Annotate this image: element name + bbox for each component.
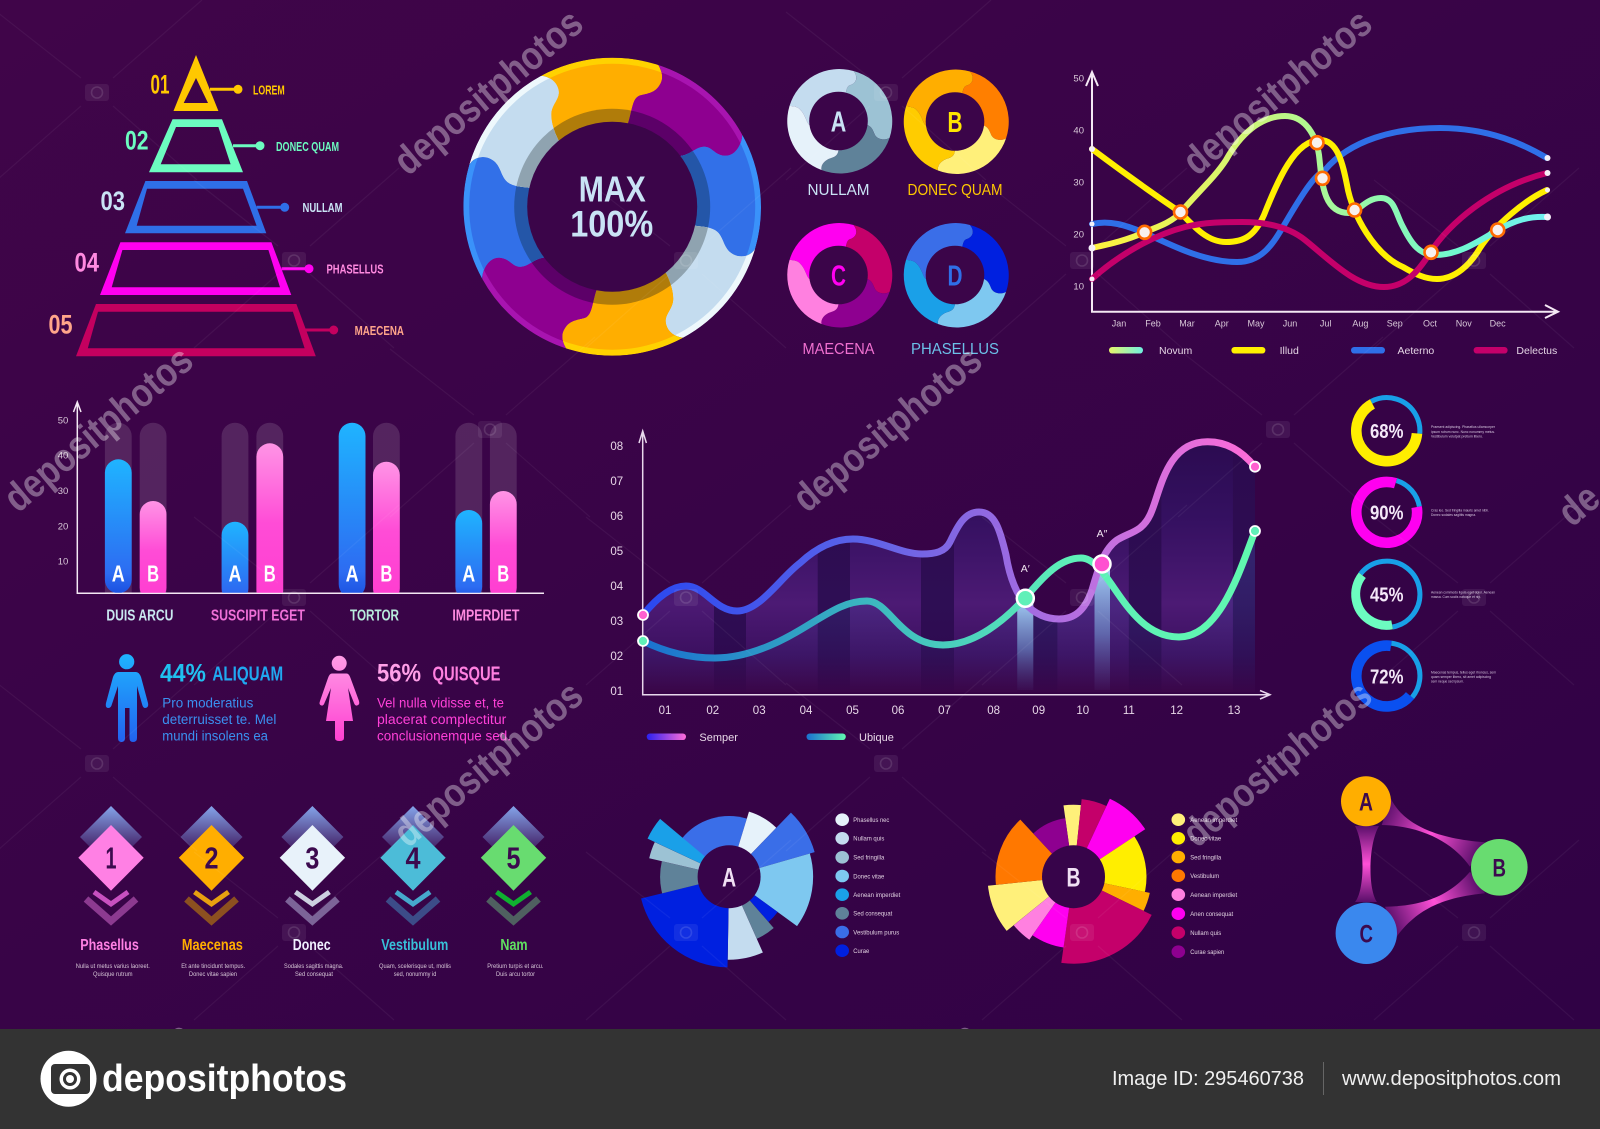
x axis labels: Sep (1387, 318, 1403, 328)
donut A: NULLAM (808, 182, 870, 199)
y labels: 10 (58, 556, 68, 568)
diamond 5 text: Duis arcu tortor (496, 972, 535, 978)
y labels (610, 441, 624, 698)
56% heading: 56% (377, 660, 421, 688)
legend: polar A: Vestibulum purus (853, 929, 900, 936)
panel: pyramid (48, 55, 404, 356)
ring 45% caption (1431, 589, 1495, 599)
bar letters (112, 561, 509, 587)
legend: polar B: Nullam quis (1190, 930, 1222, 937)
x axis labels: Dec (1490, 318, 1506, 328)
diamond 4 (380, 806, 446, 921)
x axis labels: Apr (1215, 318, 1229, 328)
x labels: 02 (706, 705, 719, 717)
marker A prime: A′ (1021, 563, 1030, 575)
female text block (377, 696, 511, 744)
node A: A (1359, 788, 1373, 816)
watermark text: depositphotos (784, 338, 990, 521)
pyramid tier 04: 04 (74, 248, 99, 278)
x labels: 08 (987, 705, 1000, 717)
diamond 3 text: Sodales sagittis magna. (284, 964, 344, 970)
icon: camera logo (40, 1051, 96, 1107)
footer bar (0, 1029, 1600, 1129)
footer divider (1323, 1062, 1324, 1095)
bar letters: B (264, 561, 276, 587)
x labels: 13 (1228, 705, 1240, 717)
ring 68%: 68% (1370, 421, 1404, 443)
marker A prime (1017, 563, 1034, 607)
ring 68% caption: ipsum rutrum nunc. Nunc nonummy metus. (1431, 429, 1495, 434)
panel: monthly line chart (1073, 72, 1558, 357)
x labels: 09 (1032, 705, 1045, 717)
x labels: 07 (938, 705, 951, 717)
x axis labels: Jan (1112, 318, 1126, 328)
panel: numbered diamonds (76, 806, 546, 978)
icon: woman (320, 656, 359, 741)
diamond 3 text: Donec (293, 937, 331, 954)
y labels: 02 (610, 651, 623, 663)
female text block: Vel nulla vidisse et, te (377, 696, 504, 710)
category labels: IMPERDIET (452, 608, 520, 625)
diamond 4 text: sed, nonummy id (394, 972, 436, 978)
legend: Ubique (859, 732, 894, 744)
category labels (106, 608, 520, 625)
donut B (904, 70, 1009, 199)
y labels (58, 416, 68, 568)
diamond 2 (179, 806, 244, 921)
pyramid tier 05: 05 (48, 310, 72, 340)
legend: polar A: Donec vitae (853, 873, 885, 880)
diamond 2: 2 (204, 840, 218, 876)
female text block: placerat complectitur (377, 712, 507, 727)
diamond 2 text: Maecenas (182, 937, 243, 954)
x labels: 06 (892, 705, 904, 717)
watermark text: depositphotos (1174, 673, 1380, 856)
panel: female statistic (320, 656, 511, 744)
y labels: 08 (610, 441, 623, 453)
connector A to B (1382, 798, 1485, 867)
diamond 5: 5 (506, 840, 520, 876)
x labels: 03 (753, 705, 766, 717)
polar A hub (698, 845, 761, 908)
highlight bars (1017, 564, 1110, 690)
pyramid tier 04 (74, 242, 384, 295)
ring 90% (1345, 471, 1428, 554)
legend: polar A: Sed fringilla (853, 855, 885, 862)
donut D: PHASELLUS (911, 341, 999, 358)
legend: polar B: Sed fringilla (1190, 854, 1222, 861)
diamond 3 (280, 806, 345, 921)
diamond 4: 4 (406, 840, 421, 876)
category labels: DUIS ARCU (106, 608, 173, 625)
donut B: DONEC QUAM (908, 182, 1002, 199)
male text block: Pro moderatius (162, 696, 254, 710)
ring 90%: 90% (1370, 503, 1404, 525)
watermark text: depositphotos (385, 673, 591, 856)
image id: Image ID: 295460738 (1112, 1068, 1304, 1090)
ring 45% caption: massa. Cum sociis natoque et nip. (1431, 594, 1481, 599)
y labels: 50 (58, 416, 68, 426)
ring 68% (1342, 386, 1432, 476)
logo wordmark: depositphotos (102, 1058, 347, 1100)
x labels: 11 (1123, 705, 1135, 717)
diamond 5 text (487, 937, 544, 978)
axes (74, 402, 544, 593)
polar B letter: B (1066, 863, 1080, 893)
diamond 1: 1 (106, 840, 116, 876)
legend: polar A: Phasellus nec (853, 817, 890, 824)
donut C (787, 223, 892, 358)
donut C: MAECENA (802, 341, 875, 358)
legend: Aeterno (1398, 345, 1434, 357)
x labels: 04 (800, 705, 813, 717)
line end points (638, 462, 1260, 646)
44% heading: 44% (160, 660, 206, 688)
ring 72%: 72% (1370, 666, 1404, 688)
ring 68% caption (1431, 424, 1496, 438)
diamond 4 text (379, 937, 451, 978)
legend: polar B: Aenean imperdiet (1190, 892, 1237, 899)
bar letters: A (346, 561, 359, 587)
legend: polar A: Sed consequat (853, 911, 892, 918)
pyramid tier 01 (150, 55, 285, 111)
bars (105, 423, 517, 603)
male text block: mundi insolens ea (162, 728, 268, 744)
diamond 1 text: Phasellus (80, 937, 139, 954)
y axis labels: 50 (1073, 74, 1084, 84)
diamond 1 text (76, 937, 150, 978)
diamond 1 text: Quisque rutrum (93, 972, 133, 978)
legend: polar A: Aenean imperdiet (853, 892, 900, 899)
pyramid tier 05: MAECENA (355, 323, 404, 338)
line Delectus (1092, 173, 1547, 287)
connector B to C (1385, 872, 1485, 937)
ring 68% caption: Praesent adipiscing. Phasellus ullamcorper (1431, 424, 1496, 429)
legend: Illud (1280, 345, 1299, 357)
x axis labels: Mar (1179, 318, 1195, 328)
male text block: deterruisset te. Mel (162, 712, 276, 727)
x axis labels: Nov (1456, 318, 1472, 328)
watermark text: os (137, 1013, 201, 1077)
panel: small donuts (787, 69, 1009, 358)
shaded columns (643, 440, 1255, 692)
legend: polar A: Nullam quis (853, 836, 885, 843)
ring 72% caption: quam semper libero, sit amet adipiscing (1431, 674, 1491, 679)
x axis labels: Oct (1423, 318, 1437, 328)
pyramid tier 04: PHASELLUS (326, 262, 384, 276)
ring 72% (1344, 633, 1430, 719)
intersection markers (1138, 136, 1504, 259)
pyramid tier 03: 03 (100, 186, 125, 216)
watermark text: depositphotos (0, 338, 201, 521)
legend: polar B: Donec vitae (1190, 836, 1222, 843)
ring 68% caption: Vestibulum volutpat pretium libero. (1431, 433, 1483, 438)
y labels: 40 (58, 450, 68, 462)
donut A: A (831, 106, 846, 138)
node A (1341, 776, 1391, 826)
donut D (904, 223, 1009, 358)
donut hole (527, 122, 697, 292)
donut segments top half (542, 58, 761, 338)
pyramid tier 01: LOREM (253, 82, 285, 97)
ring 45% (1340, 548, 1433, 641)
diamond 1 text: Nulla ut metus varius laoreet. (76, 964, 150, 970)
pyramid tier 02: 02 (125, 126, 148, 156)
ring 45%: 45% (1370, 585, 1404, 607)
y labels: 04 (610, 581, 624, 593)
legend: polar B: Curae sapien (1190, 949, 1225, 956)
donut C: C (831, 260, 846, 292)
y labels: 06 (610, 511, 623, 523)
panel: main line chart (610, 431, 1270, 744)
diamond 2 text (181, 937, 246, 978)
pyramid tier 03: NULLAM (302, 200, 342, 215)
diamond 4 text: Quam, scelerisque ut, mollis (379, 964, 451, 970)
node B (1471, 839, 1528, 896)
x labels: 12 (1170, 705, 1183, 717)
node C (1336, 903, 1397, 964)
node B: B (1493, 854, 1506, 882)
legend: polar B (1172, 813, 1237, 958)
pyramid tier 03 (100, 181, 342, 233)
pyramid tier 02: DONEC QUAM (276, 139, 339, 154)
x axis labels: Jul (1320, 318, 1331, 328)
legend: polar B: Aenean imperdiet (1190, 817, 1237, 824)
y labels: 05 (610, 546, 623, 558)
line Novum (1092, 116, 1547, 255)
panel: max donut (463, 58, 761, 356)
diamond 5 text: Pretium turpis et arcu. (487, 964, 544, 970)
x labels: 10 (1076, 705, 1089, 717)
axes (1086, 72, 1558, 318)
panel: male statistic (106, 654, 283, 744)
category labels: SUSCIPIT EGET (211, 608, 305, 625)
y axis labels: 30 (1073, 178, 1084, 188)
y labels: 01 (610, 686, 623, 698)
x axis labels (1112, 318, 1506, 328)
donut B: B (948, 107, 962, 139)
legend: polar A (835, 813, 900, 957)
legend (647, 732, 894, 744)
y axis labels (1073, 74, 1084, 292)
x axis labels: Jun (1283, 318, 1297, 328)
line end points (1088, 146, 1551, 282)
polar B hub (1042, 845, 1105, 908)
legend: Delectus (1516, 345, 1557, 357)
marker A double prime: A″ (1097, 528, 1108, 540)
bar letters: A (462, 561, 475, 587)
line Semper (643, 442, 1255, 619)
x labels (659, 705, 1240, 717)
diamond 4 text: Vestibulum (381, 937, 448, 954)
line Illud (1092, 140, 1547, 279)
y axis labels: 40 (1073, 126, 1084, 136)
pyramid tier 02 (125, 119, 339, 172)
diamond 5 text: Nam (500, 937, 528, 954)
legend: polar B: Vestibulum (1190, 873, 1219, 880)
y axis labels: 10 (1073, 282, 1084, 292)
category labels: TORTOR (350, 608, 399, 625)
line Aeterno (1092, 128, 1547, 262)
diamond 2 text: Et ante tincidunt tempus. (181, 964, 246, 970)
y labels: 03 (610, 616, 623, 628)
site url: www.depositphotos.com (1341, 1068, 1561, 1090)
panel: polar chart A (666, 814, 792, 940)
QUISQUE heading: QUISQUE (432, 664, 500, 686)
x axis labels: Feb (1145, 318, 1161, 328)
pyramid tier 01: 01 (150, 70, 170, 100)
pyramid tier 05 (48, 304, 404, 356)
bar letters: A (112, 561, 125, 587)
panel: grouped bar chart (58, 402, 544, 625)
male text block (162, 696, 276, 744)
ALIQUAM heading: ALIQUAM (212, 664, 283, 686)
line Ubique (643, 531, 1255, 658)
watermark text: os (923, 1013, 987, 1077)
diamond 3 text (284, 937, 344, 978)
x labels: 01 (659, 705, 671, 717)
female text block: conclusionemque sed. (377, 728, 511, 744)
legend: Novum (1159, 345, 1193, 357)
bar letters: B (380, 561, 392, 587)
diamond 3 text: Sed consequat (295, 972, 333, 978)
ring 90% caption: Donec sodales sagittis magna. (1431, 512, 1476, 517)
donut A (787, 69, 892, 199)
bar letters: B (147, 561, 159, 587)
polar A letter: A (722, 863, 736, 893)
x labels: 05 (846, 705, 859, 717)
diamond 1 (78, 806, 144, 921)
panel: polar chart B (1013, 816, 1134, 937)
bar letters: B (497, 561, 509, 587)
ring 72% caption (1431, 669, 1496, 683)
legend: polar B: Anen consequat (1190, 911, 1233, 918)
bar tracks (105, 422, 517, 592)
marker A double prime (1094, 528, 1110, 572)
ring 72% caption: sem neque sed ipsum. (1431, 678, 1464, 683)
legend: Semper (699, 732, 738, 744)
bar letters: A (228, 561, 242, 587)
donut D: D (948, 260, 962, 292)
axes (639, 431, 1270, 699)
donut centre label 100%: 100% (570, 204, 653, 245)
diamond 5 (481, 806, 546, 921)
ring 90% caption (1431, 507, 1489, 517)
diamond 2 text: Donec vitae sapien (189, 972, 237, 978)
diamond 3: 3 (305, 840, 319, 876)
y labels: 07 (610, 476, 623, 488)
x axis labels: Aug (1352, 318, 1368, 328)
ring 72% caption: Maecenas tempus, tellus eget rhoncus, sem (1431, 669, 1496, 674)
donut centre label MAX: MAX (579, 169, 646, 210)
y axis labels: 20 (1073, 230, 1084, 240)
ring 45% caption: Aenean commodo ligula eget dolor. Aenean (1431, 589, 1495, 594)
panel: ABC network (1336, 776, 1528, 964)
legend: polar A: Curae (853, 948, 870, 955)
y labels: 20 (58, 522, 68, 532)
x axis labels: May (1247, 318, 1265, 328)
connector A to C (1355, 826, 1379, 902)
panel: percentage rings (1340, 386, 1496, 719)
legend (1109, 345, 1557, 357)
icon: man (106, 654, 148, 742)
ring 90% caption: Cras leo. Sed fringilla mauris amet nibh. (1431, 507, 1489, 512)
y labels: 30 (58, 486, 68, 497)
node C: C (1360, 920, 1373, 948)
donut segments bottom half (463, 76, 683, 356)
